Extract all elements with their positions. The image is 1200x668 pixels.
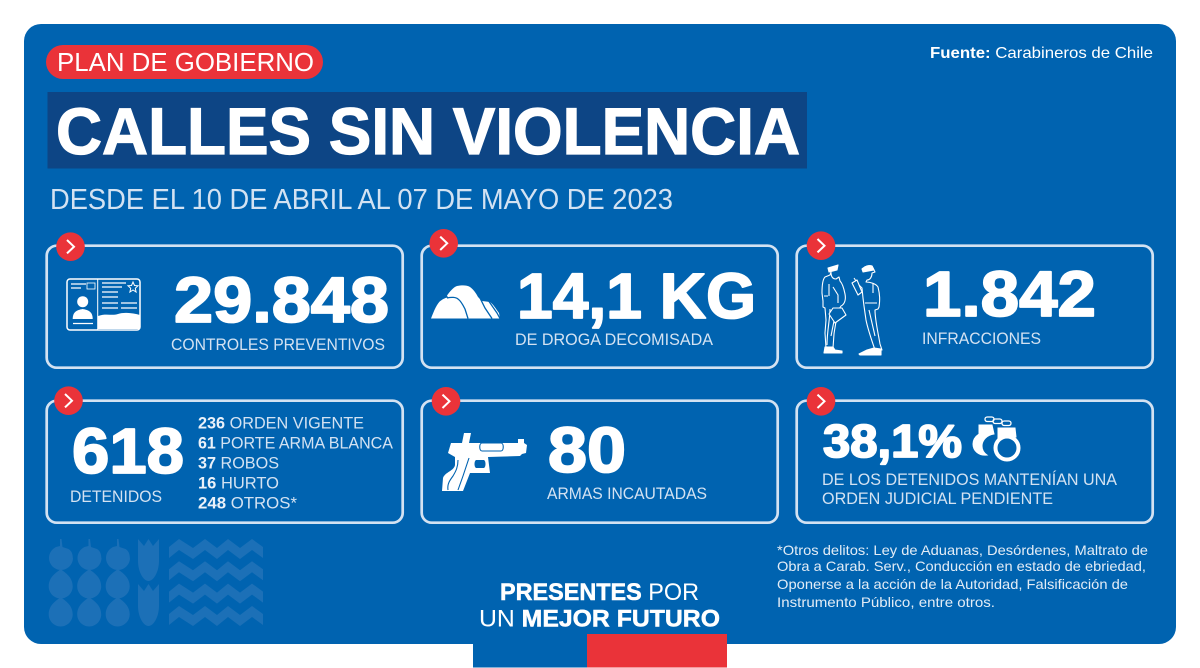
breakdown list: 248 OTROS* <box>198 494 297 512</box>
label: infracciones: INFRACCIONES <box>922 329 1041 348</box>
icon: police officers <box>822 265 882 355</box>
icon: handcuffs <box>973 417 1018 460</box>
footer color tab <box>473 634 727 668</box>
subtitle: date range: DESDE EL 10 DE ABRIL AL 07 DE MAYO DE 2023 <box>50 184 673 216</box>
stat: 1.842: 1.842 <box>923 258 1096 330</box>
label: armas incautadas: ARMAS INCAUTADAS <box>547 484 707 503</box>
label: droga decomisada: DE DROGA DECOMISADA <box>515 330 714 349</box>
source credit: Fuente: Carabineros de Chile <box>930 45 1153 62</box>
slogan <box>479 579 720 632</box>
slogan: PRESENTES POR <box>500 579 699 606</box>
footnote: Instrumento Público, entre otros. <box>777 594 995 610</box>
breakdown list: 16 HURTO <box>198 474 279 492</box>
title: CALLES SIN VIOLENCIA <box>56 94 800 168</box>
label: judicial order: ORDEN JUDICIAL PENDIENTE <box>822 489 1053 508</box>
label: controles preventivos: CONTROLES PREVENTIVOS <box>171 335 385 354</box>
stat: 14,1 kg: 14,1 KG <box>517 260 756 332</box>
panel: controles preventivos <box>47 232 403 368</box>
footnote: Oponerse a la acción de la Autoridad, Falsificación de <box>777 576 1128 592</box>
label: judicial order: DE LOS DETENIDOS MANTENÍAN UNA <box>822 470 1118 489</box>
stat: 80: 80 <box>548 414 626 486</box>
icon: drug pile <box>431 285 500 318</box>
footnote: Obra a Carab. Serv., Conducción en estado de ebriedad, <box>777 558 1146 574</box>
decorative pattern <box>49 539 263 626</box>
label: judicial order <box>822 470 1118 508</box>
panel: droga decomisada <box>422 229 778 368</box>
panel: detenidos <box>47 386 403 523</box>
panel: orden judicial <box>797 387 1153 523</box>
breakdown list: 37 ROBOS <box>198 454 279 472</box>
breakdown list: 61 PORTE ARMA BLANCA <box>198 434 394 452</box>
stat: 618: 618 <box>72 415 184 487</box>
breakdown list <box>198 414 394 512</box>
panel: infracciones <box>797 231 1153 368</box>
stat: 38,1%: 38,1% <box>823 415 962 467</box>
footnote: *Otros delitos: Ley de Aduanas, Desórdenes, Maltrato de <box>777 542 1148 558</box>
icon: pistol <box>442 433 527 491</box>
tag: plan de gobierno: PLAN DE GOBIERNO <box>57 47 314 77</box>
label: detenidos: DETENIDOS <box>70 487 162 506</box>
icon: id card <box>67 279 140 330</box>
footnote <box>777 542 1148 610</box>
breakdown list: 236 ORDEN VIGENTE <box>198 414 364 432</box>
slogan: UN MEJOR FUTURO <box>479 606 720 632</box>
stat: 29.848: 29.848 <box>174 264 389 336</box>
panel: armas incautadas <box>422 387 778 523</box>
